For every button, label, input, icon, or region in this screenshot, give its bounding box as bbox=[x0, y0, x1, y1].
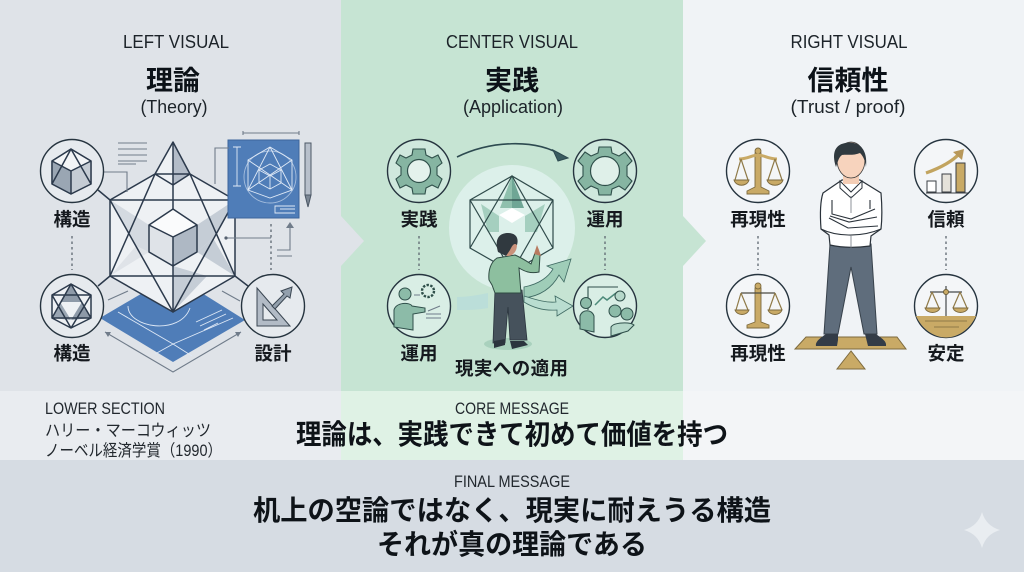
icon: sparkle bbox=[964, 512, 1000, 548]
final message: それが真の理論である bbox=[377, 528, 647, 560]
left heading: (Theory) bbox=[140, 97, 208, 117]
arrow: left to center bbox=[341, 216, 364, 266]
arrow: center to right bbox=[683, 216, 706, 266]
hexagon model bbox=[470, 176, 553, 272]
center heading: CENTER VISUAL bbox=[446, 32, 578, 52]
core message: CORE MESSAGE bbox=[455, 400, 569, 418]
panel: right background bbox=[683, 0, 1024, 392]
label: stability: 安定 bbox=[927, 343, 965, 364]
icon: gear operation bbox=[574, 140, 636, 202]
band: lower strip bbox=[0, 391, 1024, 460]
final message: 机上の空論ではなく、現実に耐えうる構造 bbox=[253, 495, 771, 526]
right heading: (Trust / proof) bbox=[790, 97, 906, 117]
left heading bbox=[123, 32, 229, 117]
icon: pencil bbox=[305, 143, 311, 207]
center heading: 実践 bbox=[485, 66, 539, 96]
final message bbox=[253, 473, 771, 560]
label: operation left: 運用 bbox=[400, 343, 438, 364]
icon: stability bbox=[914, 274, 978, 338]
annotation lines bbox=[98, 131, 299, 286]
icon: team presentation bbox=[574, 274, 636, 338]
lower section text: LOWER SECTION bbox=[45, 400, 165, 418]
left heading: LEFT VISUAL bbox=[123, 32, 229, 52]
panel: final message bbox=[0, 460, 1024, 572]
center heading bbox=[446, 32, 578, 117]
right heading bbox=[790, 32, 908, 117]
person arms crossed bbox=[816, 142, 886, 346]
label: reproducibility top: 再現性 bbox=[730, 209, 786, 230]
panel: left background bbox=[0, 0, 341, 392]
right heading: RIGHT VISUAL bbox=[790, 32, 908, 52]
core message: 理論は、実践できて初めて価値を持つ bbox=[296, 419, 728, 450]
label: trust: 信頼 bbox=[927, 209, 965, 230]
label: structure bottom: 構造 bbox=[53, 343, 91, 364]
blueprint floor bbox=[100, 275, 245, 372]
icon: design ruler bbox=[242, 274, 304, 338]
left heading: 理論 bbox=[146, 66, 200, 96]
label: application to reality: 現実への適用 bbox=[455, 358, 568, 379]
glow circle bbox=[449, 165, 575, 291]
label: operation right: 運用 bbox=[586, 209, 624, 230]
icon: scale bottom bbox=[726, 274, 790, 338]
seesaw bbox=[795, 337, 906, 369]
core message bbox=[296, 400, 728, 450]
label: reproducibility bottom: 再現性 bbox=[730, 343, 786, 364]
label: structure top: 構造 bbox=[53, 209, 91, 230]
blueprint sheet bbox=[228, 140, 299, 218]
lower section text: ハリー・マーコウィッツ bbox=[45, 421, 211, 440]
polyhedron bbox=[110, 142, 235, 312]
icon: structure bottom bbox=[40, 274, 104, 338]
person pointing bbox=[484, 233, 541, 350]
center heading: (Application) bbox=[463, 97, 563, 117]
flow arrows bbox=[457, 144, 573, 316]
icon: scale top bbox=[726, 140, 790, 202]
lower section text bbox=[45, 400, 222, 460]
panel: center visual bbox=[388, 32, 636, 379]
right heading: 信頼性 bbox=[808, 66, 888, 96]
icon: gear practice bbox=[388, 140, 450, 202]
icon: trust chart bbox=[914, 140, 978, 202]
label: practice: 実践 bbox=[400, 209, 438, 230]
icon: operator bbox=[388, 274, 450, 338]
panel: center background bbox=[341, 0, 683, 392]
label: design: 設計 bbox=[254, 343, 292, 364]
icon: structure top bbox=[40, 140, 104, 202]
panel: right visual bbox=[726, 32, 978, 369]
lower section text: ノーベル経済学賞（1990） bbox=[45, 441, 222, 460]
final message: FINAL MESSAGE bbox=[454, 473, 570, 491]
panel: left visual bbox=[40, 32, 311, 372]
